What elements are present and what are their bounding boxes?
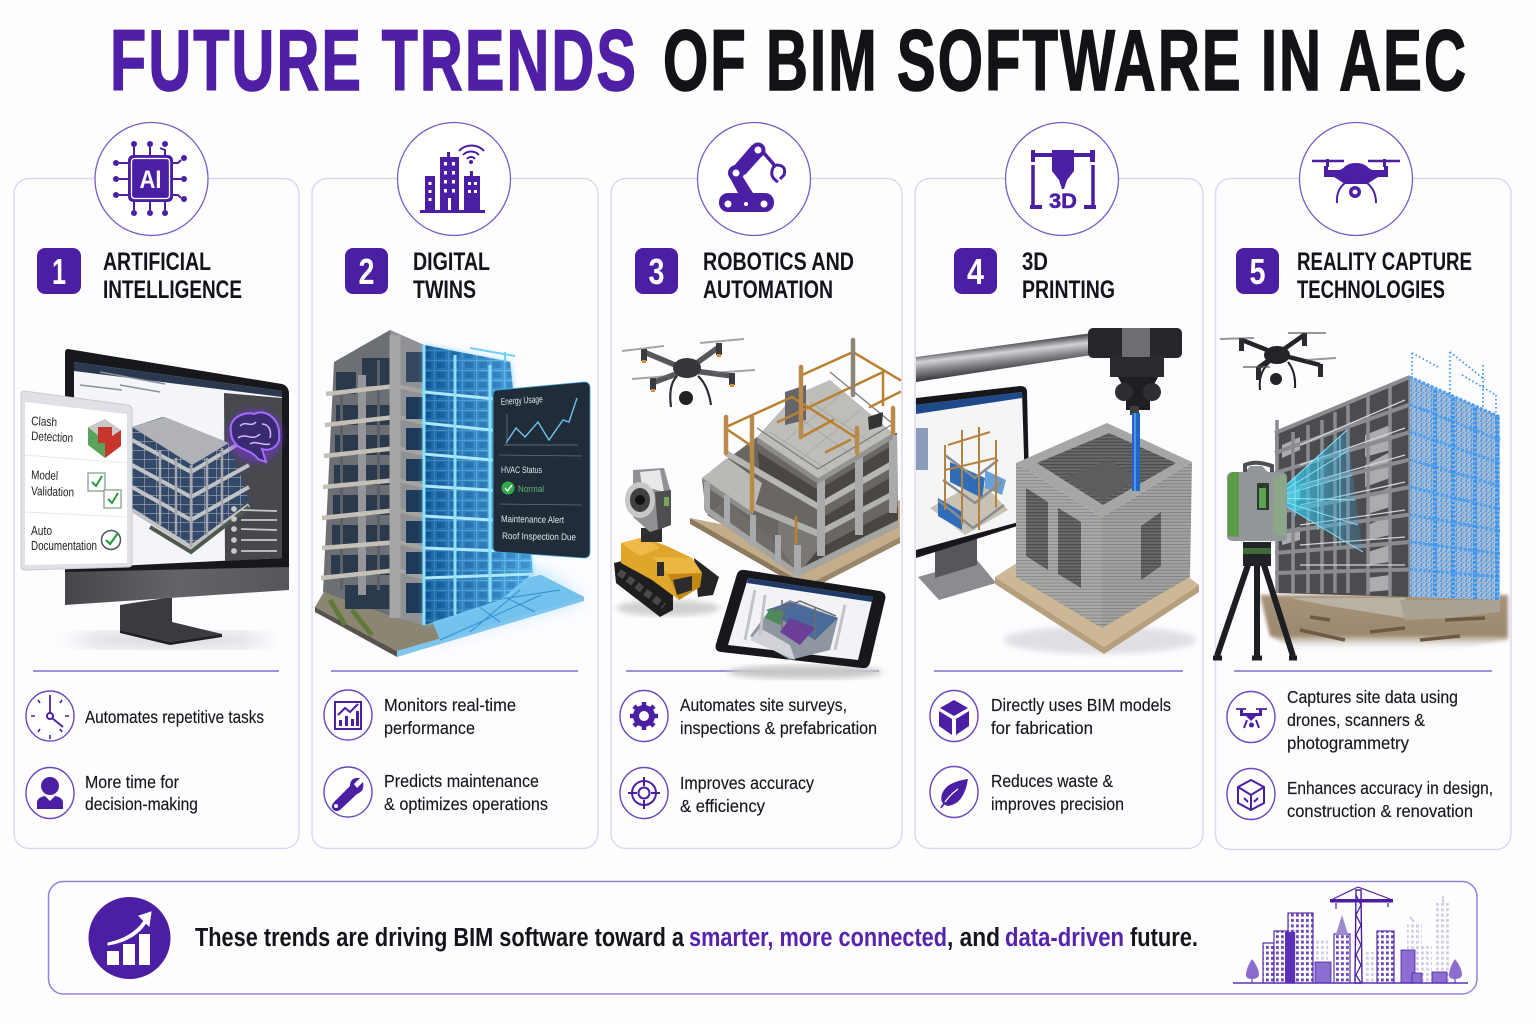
illustration: digital twin building — [315, 330, 590, 657]
icon: leaf — [930, 766, 978, 818]
text: directly uses — [991, 695, 1171, 738]
text: monitors: Monitors real-time — [384, 695, 516, 715]
text: predicts — [384, 771, 548, 814]
icon: 3D printer — [1006, 122, 1118, 236]
tower crane — [1330, 887, 1393, 983]
heading: reality capture: REALITY CAPTURE — [1297, 248, 1472, 276]
title: FUTURE TRENDS — [110, 13, 638, 109]
heading: robotics — [703, 248, 854, 304]
text: closing statement: These trends are driving BIM software toward a — [195, 924, 685, 952]
text: captures — [1287, 687, 1458, 753]
dashboard panel: Maintenance Alert — [501, 514, 564, 526]
text: closing statement: future. — [1130, 924, 1198, 952]
text: closing statement: smarter, more connected — [689, 924, 947, 952]
text: accuracy: Improves accuracy — [680, 773, 814, 793]
heading: reality capture — [1297, 248, 1472, 304]
icon: AI chip: AI — [140, 166, 162, 194]
number badge 5: 5 — [1250, 251, 1266, 292]
heading: reality capture: TECHNOLOGIES — [1297, 276, 1445, 304]
text: automates repetitive tasks: Automates repetitive tasks — [85, 707, 264, 727]
icon: drone — [1300, 122, 1412, 236]
text: monitors: performance — [384, 718, 475, 738]
number badge 3 — [635, 248, 678, 294]
point cloud — [1410, 352, 1500, 600]
panel: digital twins — [312, 122, 598, 848]
floating panel: Model — [31, 468, 58, 483]
text: more time: decision-making — [85, 794, 198, 814]
heading: digital twins: TWINS — [413, 276, 476, 304]
sidebar sliders — [232, 507, 277, 553]
text: more time: More time for — [85, 772, 179, 792]
number badge 1: 1 — [52, 251, 66, 292]
floating panel: Auto — [31, 524, 52, 538]
text: closing statement: , and — [947, 924, 1000, 952]
dashboard panel: Normal — [518, 484, 544, 495]
dashboard panel: HVAC Status — [501, 465, 542, 476]
illustration: scanned building — [1260, 352, 1508, 652]
interior volume — [702, 433, 898, 577]
heading: 3D printing: 3D — [1022, 248, 1048, 276]
text: closing statement: data-driven — [1005, 924, 1124, 952]
icon: clock — [26, 691, 74, 741]
columns — [704, 435, 897, 577]
trees — [1246, 959, 1462, 983]
text: more time — [85, 772, 198, 814]
icon: survey drone — [1227, 692, 1275, 742]
heading: artificial intelligence — [103, 248, 242, 304]
floating panel: Validation — [31, 484, 74, 499]
dashboard panel — [493, 382, 590, 558]
text: reduces waste: improves precision — [991, 794, 1124, 814]
illustration: city skyline with crane — [1233, 887, 1468, 983]
text: captures: photogrammetry — [1287, 733, 1409, 753]
heading: robotics: ROBOTICS AND — [703, 248, 854, 276]
number badge 2 — [345, 248, 388, 294]
text: predicts: Predicts maintenance — [384, 771, 539, 791]
icon: growth chart — [88, 897, 170, 979]
icon: 3D printer: 3D — [1049, 190, 1077, 213]
text: captures: drones, scanners & — [1287, 710, 1425, 730]
panel: artificial intelligence — [14, 122, 299, 848]
number badge 4 — [954, 248, 997, 294]
text: reduces waste: Reduces waste & — [991, 771, 1113, 791]
dashboard panel: Roof Inspection Due — [502, 531, 576, 543]
heading: artificial intelligence: ARTIFICIAL — [103, 248, 211, 276]
text: site surveys — [680, 695, 877, 738]
number badge 5 — [1236, 248, 1279, 294]
number badge 4: 4 — [967, 251, 984, 292]
number badge 2: 2 — [358, 251, 374, 292]
heading: robotics: AUTOMATION — [703, 276, 833, 304]
illustration: drone — [622, 339, 755, 407]
panel: reality capture — [1213, 122, 1511, 850]
scaffold — [726, 352, 900, 543]
text: directly uses: for fabrication — [991, 718, 1093, 738]
floating panel — [21, 391, 132, 570]
text: accuracy — [680, 773, 814, 816]
text: site surveys: Automates site surveys, — [680, 695, 847, 715]
panel: robotics and automation — [611, 122, 902, 848]
text: enhances: Enhances accuracy in design, — [1287, 778, 1493, 798]
text: enhances — [1287, 778, 1493, 821]
icon: wireframe cube — [1227, 768, 1275, 820]
number badge 1 — [37, 248, 81, 294]
icon: wrench — [324, 767, 372, 817]
heading: 3D printing — [1022, 248, 1115, 304]
illustration: scanner robot — [614, 468, 720, 617]
text: monitors — [384, 695, 516, 738]
dashboard panel: Energy Usage — [500, 394, 543, 408]
icon: cube — [930, 690, 978, 742]
text: directly uses: Directly uses BIM models — [991, 695, 1171, 715]
floating panel: Detection — [31, 429, 74, 445]
text: closing statement — [195, 924, 1198, 952]
illustration: printer arm — [916, 328, 1182, 415]
floating panel: Clash — [31, 414, 58, 429]
illustration: printed concrete block — [995, 413, 1199, 654]
number badge 3: 3 — [648, 251, 664, 292]
floor slabs — [705, 505, 898, 577]
icon: AI chip — [95, 122, 208, 236]
panel: 3D printing — [915, 122, 1203, 848]
text: site surveys: inspections & prefabrication — [680, 718, 877, 738]
icon: target — [620, 768, 668, 818]
heading: artificial intelligence: INTELLIGENCE — [103, 276, 242, 304]
illustration: BIM monitor with AI — [21, 349, 289, 646]
illustration: monitor with model — [916, 386, 1030, 600]
roof — [757, 380, 893, 478]
screen building model — [132, 417, 249, 552]
scan beam — [1272, 430, 1363, 552]
callout banner — [48, 882, 1477, 994]
text: enhances: construction & renovation — [1287, 801, 1473, 821]
illustration: drone — [1220, 333, 1336, 390]
text: reduces waste — [991, 771, 1124, 814]
concrete half — [321, 330, 424, 625]
icon: smart buildings — [398, 122, 510, 236]
heading: digital twins — [413, 248, 490, 304]
heading: digital twins: DIGITAL — [413, 248, 490, 276]
illustration: tablet — [716, 570, 885, 679]
text: accuracy: & efficiency — [680, 796, 765, 816]
text: predicts: & optimizes operations — [384, 794, 548, 814]
illustration: laser scanner on tripod — [1213, 463, 1297, 658]
brain — [227, 409, 283, 463]
illustration: structure under construction — [690, 340, 900, 591]
title — [110, 13, 1468, 109]
floating panel: Documentation — [31, 539, 97, 553]
heading: 3D printing: PRINTING — [1022, 276, 1115, 304]
hologram half — [424, 345, 533, 625]
icon: gear — [620, 690, 668, 742]
icon: performance chart — [324, 690, 372, 740]
icon: person — [26, 768, 74, 818]
icon: robot arm — [698, 122, 810, 236]
text: captures: Captures site data using — [1287, 687, 1458, 707]
